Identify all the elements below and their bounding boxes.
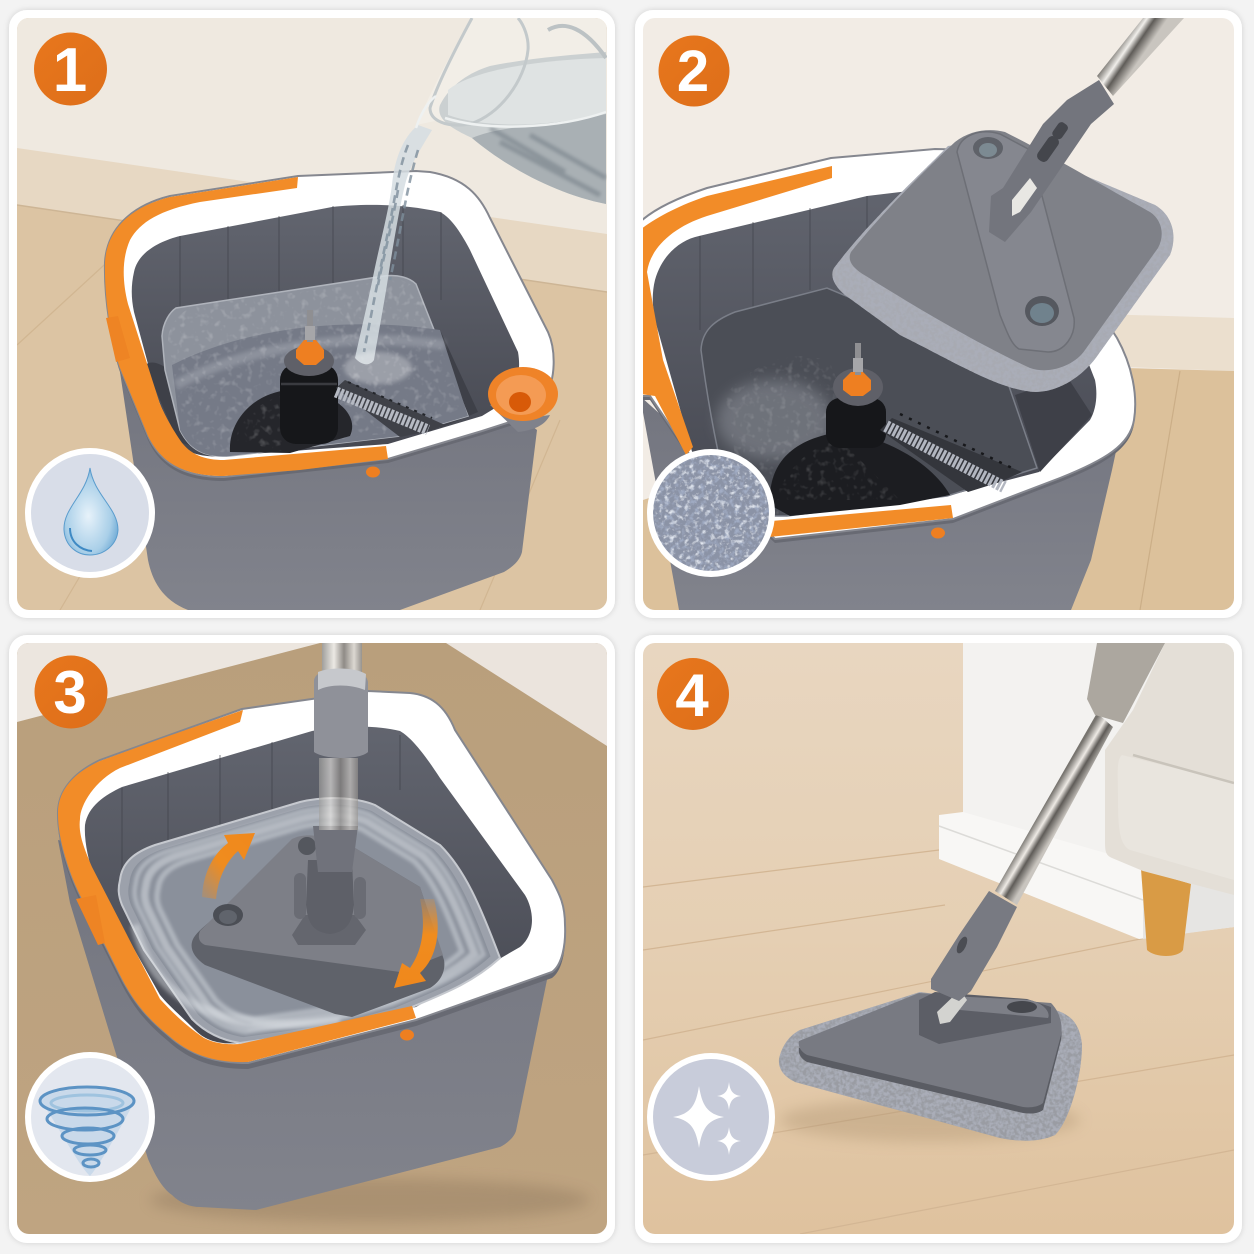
- step badge 3: 3: [53, 659, 87, 726]
- orange handle lower: [760, 505, 953, 538]
- panel: step 2 attach mop pad: [640, 18, 1234, 610]
- mop pole: [314, 643, 368, 830]
- step badge 1: [34, 32, 107, 106]
- indicator dot: [931, 528, 945, 538]
- spinner hub: [230, 310, 352, 453]
- rotation arrow: upper left: [202, 833, 255, 899]
- swirling water tray: [119, 798, 500, 1043]
- step badge 3: [34, 656, 108, 728]
- sofa leg: [1141, 869, 1191, 956]
- step badge 4: [657, 658, 729, 730]
- mop pad: [779, 992, 1082, 1141]
- step badge 2: [658, 36, 730, 106]
- step badge 2: 2: [677, 39, 709, 104]
- mop pole: [1097, 18, 1184, 96]
- icon: sparkles: [647, 1053, 775, 1181]
- mop pole: [995, 713, 1113, 905]
- panel: step 1 pour water into bucket: [17, 18, 607, 610]
- bucket body: [58, 840, 548, 1210]
- orange funnel: [488, 367, 558, 432]
- orange handle: [58, 710, 416, 1062]
- panel: card 4 frame: [635, 635, 1242, 1243]
- glass jug: [416, 18, 606, 204]
- panel: card 3 frame: [9, 635, 615, 1243]
- icon: water vortex: [25, 1052, 155, 1182]
- rotation arrow: lower right: [394, 899, 438, 988]
- orange handle: [640, 166, 832, 455]
- mop ridge: [957, 132, 1074, 352]
- water tray: [162, 275, 468, 456]
- bucket body: [640, 396, 1127, 610]
- bucket interior: [85, 726, 532, 1043]
- bucket rim: [640, 149, 1135, 539]
- bucket interior: [132, 205, 519, 456]
- water tray: [701, 288, 1037, 516]
- indicator dot: [366, 466, 380, 478]
- sofa: [1105, 643, 1234, 895]
- indicator dot: [400, 1030, 414, 1040]
- bucket rim: [105, 171, 554, 477]
- pouring water stream: [344, 125, 432, 384]
- panel: step 3 spin the mop: [17, 643, 607, 1234]
- wringer brush: [336, 380, 445, 437]
- panel: card 2 frame: [635, 10, 1242, 618]
- skirting board: [939, 812, 1234, 939]
- spinner hub: [770, 343, 950, 516]
- bucket rim: [58, 691, 565, 1063]
- step badge 4: 4: [675, 662, 709, 729]
- mop connector: [931, 891, 1017, 1001]
- panel: step 4 mop the floor: [643, 643, 1234, 1234]
- wringer brush: [880, 414, 1022, 492]
- panel: card 1 frame: [9, 10, 615, 618]
- wall: [963, 643, 1234, 925]
- handle clip: [106, 316, 130, 362]
- handle clip: [76, 895, 105, 945]
- orange handle: [105, 177, 388, 476]
- bucket body: [120, 372, 537, 610]
- step badge 1: 1: [53, 36, 87, 105]
- mop bracket: [919, 990, 1051, 1044]
- icon: microfibre texture: [647, 449, 775, 577]
- bucket interior: [652, 192, 1096, 494]
- mop plate: [799, 993, 1062, 1114]
- icon: water drop: [25, 448, 155, 578]
- mop connector: [292, 826, 366, 945]
- mop connector: [989, 80, 1114, 242]
- mop plate in water: [192, 835, 444, 1017]
- translucent pole sleeve: [1087, 643, 1165, 723]
- mop plate: [850, 130, 1162, 370]
- mop pad: [832, 140, 1174, 392]
